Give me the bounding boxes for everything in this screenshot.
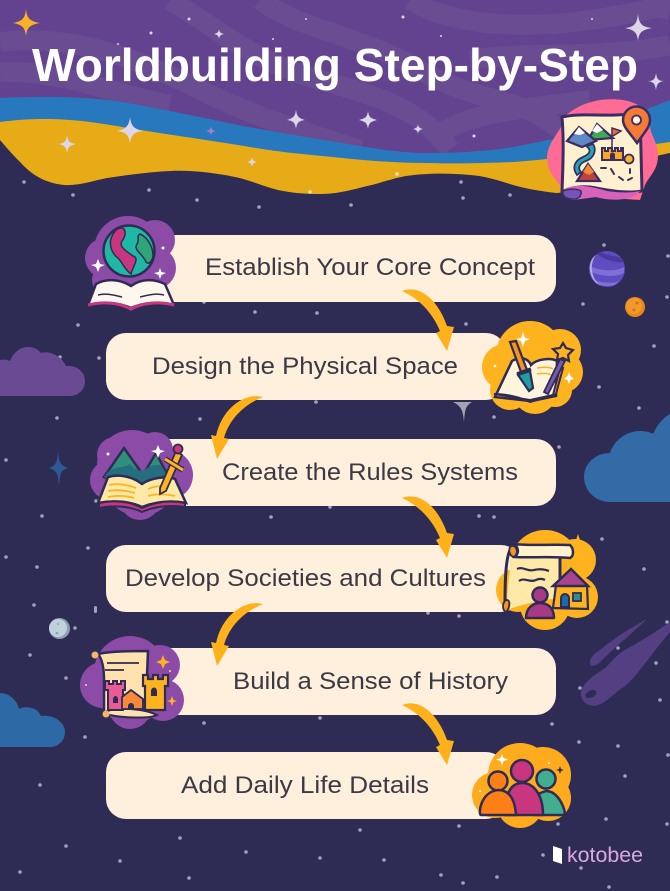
step 1 pill [150, 235, 556, 302]
icon: treasure map [547, 99, 658, 200]
title: Worldbuilding Step-by-Step [32, 39, 638, 91]
step 4 pill [106, 545, 521, 612]
icon: mountains, book and sword [90, 430, 193, 520]
step 2 pill: Design the Physical Space [152, 353, 458, 380]
step 3 pill: Create the Rules Systems [222, 459, 518, 486]
icon: scroll and castle [80, 636, 184, 729]
arrow: step 1 to 2 [402, 289, 454, 351]
arrow: step 4 to 5 [211, 603, 263, 666]
step 4 pill: Develop Societies and Cultures [125, 565, 486, 592]
icon: group of people [472, 743, 571, 828]
kotobee logo: kotobee [567, 844, 643, 867]
step 6 pill: Add Daily Life Details [181, 772, 429, 799]
cloud: blue right [584, 414, 670, 502]
planet: purple [589, 251, 625, 287]
planet: orange [625, 297, 645, 317]
step 6 pill [106, 752, 506, 819]
arrow: step 2 to 3 [211, 396, 263, 459]
icon: book with pen and wand [482, 321, 583, 414]
cloud: purple left [0, 347, 85, 396]
step 1 pill: Establish Your Core Concept [205, 254, 535, 281]
background stars and dots [4, 172, 670, 889]
star: grey [453, 402, 472, 422]
stars in header [13, 9, 664, 167]
arrow: step 3 to 4 [402, 496, 454, 558]
cloud: blue left [0, 693, 65, 747]
comets [581, 619, 670, 706]
step 5 pill [150, 648, 556, 715]
arrow: step 5 to 6 [402, 703, 454, 765]
planet: grey moon [49, 618, 70, 639]
step 2 pill [106, 333, 506, 400]
star: blue [49, 452, 68, 486]
header band [0, 0, 670, 220]
icon: globe and book [85, 216, 176, 309]
icon: scroll, house and person [496, 530, 598, 630]
step 3 pill [150, 439, 556, 506]
step 5 pill: Build a Sense of History [233, 668, 508, 695]
